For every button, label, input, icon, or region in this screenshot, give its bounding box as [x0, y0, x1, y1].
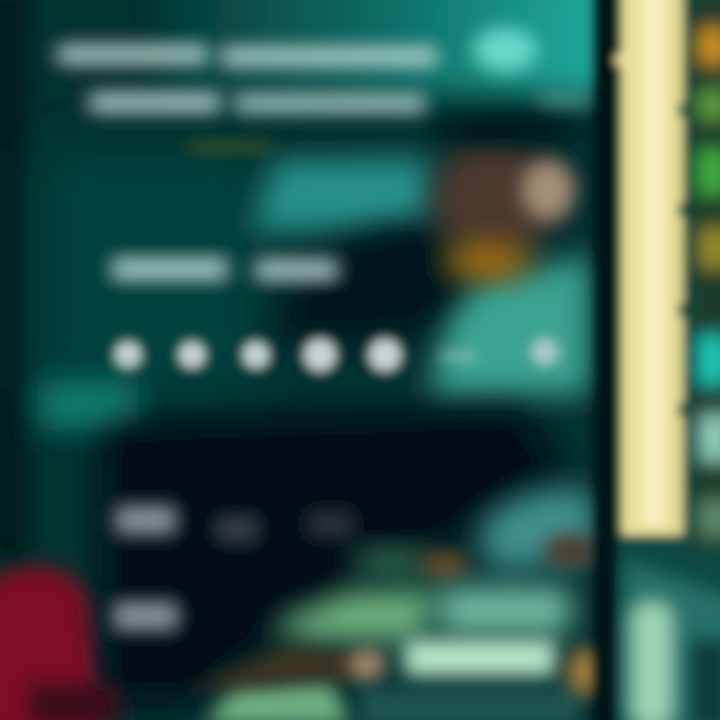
row of dots	[114, 338, 559, 372]
cream strip	[615, 0, 691, 535]
dark body	[275, 224, 470, 340]
right side background	[612, 0, 720, 720]
figure: person	[275, 112, 590, 395]
small labels	[114, 506, 354, 630]
panel: top teal band	[160, 0, 610, 95]
lower right shape	[625, 560, 720, 720]
panel: teal window	[250, 158, 430, 232]
colored side chips	[690, 0, 720, 550]
stat text	[112, 258, 338, 280]
black vertical bar	[592, 0, 618, 720]
hair	[433, 112, 577, 148]
dark lower panel	[105, 410, 560, 700]
beard	[444, 244, 532, 280]
face	[433, 142, 557, 258]
desk illustration	[190, 489, 603, 720]
accent: amber streak	[190, 142, 270, 152]
red shape	[0, 567, 120, 720]
shirt	[430, 255, 590, 395]
teal block left	[38, 380, 138, 430]
title block	[58, 46, 590, 111]
